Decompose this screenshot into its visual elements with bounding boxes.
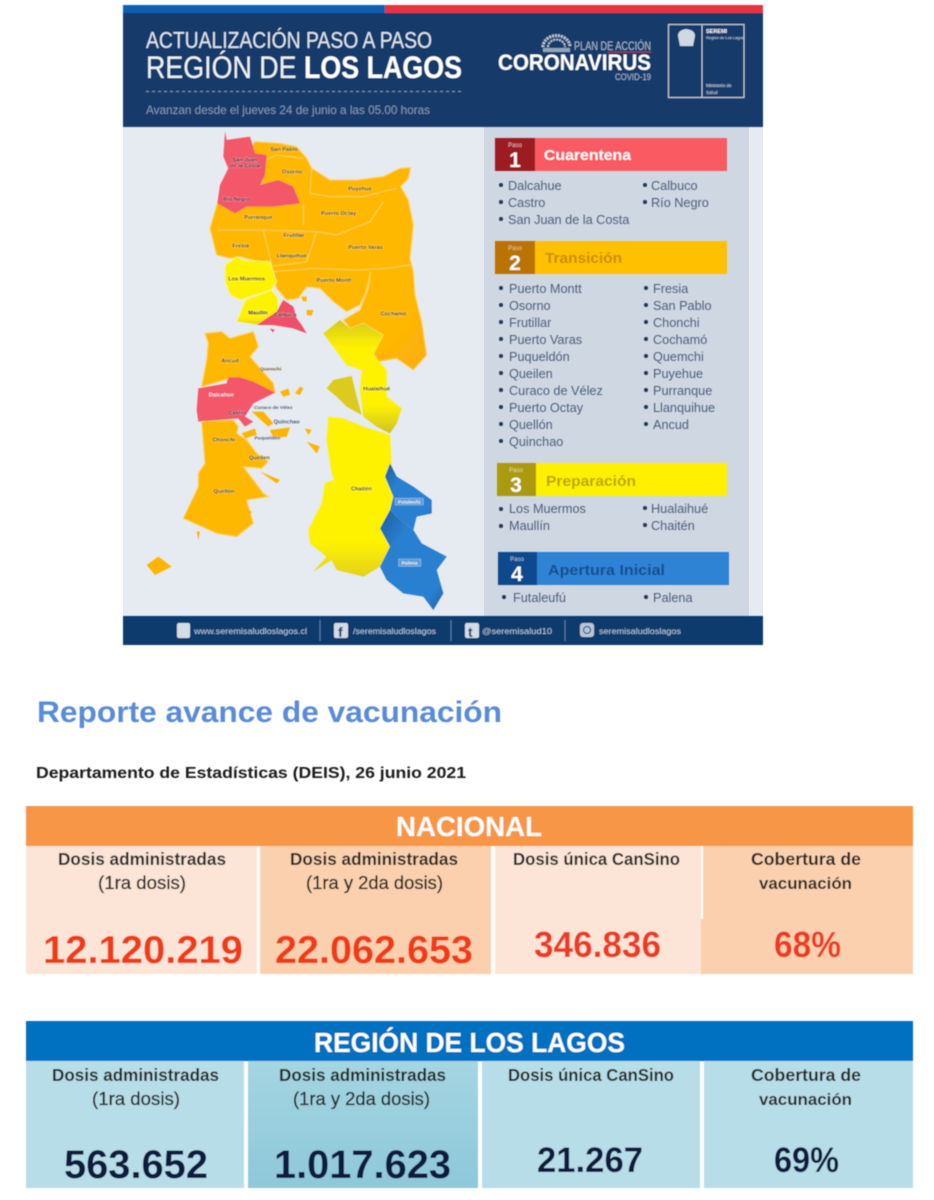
legend: paso 3 preparación: 3 — [510, 474, 522, 497]
cell: dosis 1ra y 2da región: Dosis administradas — [279, 1065, 446, 1085]
icon: instagram — [580, 623, 594, 637]
logo: seremi de salud — [668, 24, 744, 98]
legend: paso 2 transición: Paso — [508, 246, 522, 252]
icon: facebook: f — [338, 624, 343, 640]
list: comunas en transición, columna 2: San Pablo — [653, 299, 712, 313]
legend: paso 3 preparación: Paso — [509, 468, 523, 474]
footer: redes sociales: /seremisaludloslagos — [353, 627, 436, 636]
map labels: comunas del norte — [223, 147, 407, 319]
map labels: comunas del norte: Puyehue — [348, 187, 372, 193]
map labels: comunas del norte: Llanquihue — [277, 253, 307, 259]
list: comunas en apertura inicial: Palena — [653, 591, 693, 605]
map region: los muermos — [225, 257, 277, 300]
cell: dosis única nacional: 346.836 — [534, 924, 661, 965]
cell: cobertura región — [704, 1061, 913, 1188]
map region: chaitén — [308, 417, 393, 577]
footer: redes sociales: www.seremisaludloslagos.cl — [193, 627, 307, 636]
list: comunas en preparación: Chaitén — [651, 519, 695, 533]
map labels: comunas del norte: Frutillar — [283, 233, 305, 239]
map labels: comunas del sur: Dalcahue — [209, 392, 234, 398]
map region: isla chaitén norte — [327, 376, 362, 415]
list: comunas en cuarentena — [499, 179, 709, 227]
list: comunas en transición, columna 1: Curaco de Vélez — [509, 384, 603, 398]
map region: ancud y quemchi — [202, 332, 275, 393]
legend: paso 1 cuarentena: 1 — [509, 149, 521, 172]
cell: dosis 1ra región: (1ra dosis) — [92, 1089, 180, 1109]
map labels: comunas del sur: Castro — [228, 410, 247, 416]
list: comunas en transición, columna 1: Queilen — [509, 367, 553, 381]
table: región de los lagos — [26, 1021, 913, 1188]
map labels: comunas del norte: Puerto Montt — [317, 278, 352, 284]
cell: dosis única región: 21.267 — [537, 1141, 643, 1180]
map labels: comunas del norte: San Juan — [232, 158, 258, 164]
map labels: comunas del norte: Río Negro — [223, 197, 251, 203]
cell: dosis única región: Dosis única CanSino — [508, 1065, 674, 1085]
legend: paso 4 apertura inicial: Paso — [510, 557, 524, 563]
cell: dosis 1ra nacional: Dosis administradas — [58, 849, 226, 869]
map labels: comunas del norte: Osorno — [282, 170, 303, 176]
map island: guafo — [147, 557, 172, 575]
map labels: comunas del sur: Puqueldón — [254, 436, 280, 442]
cell: cobertura nacional: 68% — [774, 924, 841, 965]
map region: límites comunales — [217, 155, 410, 272]
legend: paso 2 transición: Transición — [545, 250, 622, 267]
cell: dosis 1ra y 2da región: (1ra y 2da dosis) — [293, 1089, 430, 1109]
map labels: comunas del norte: Puerto Varas — [348, 245, 383, 251]
list: comunas en transición, columna 2: Purranque — [653, 384, 712, 398]
logo: seremi de salud: Ministerio de — [706, 83, 732, 88]
map labels: comunas del norte: Cochamó — [380, 312, 407, 318]
footer: redes sociales: seremisaludloslagos — [599, 627, 681, 636]
map region: hualaihué — [323, 320, 402, 433]
legend: paso 4 apertura inicial: Apertura Inicial — [548, 562, 665, 579]
map labels: comunas del sur: Quinchao — [274, 420, 300, 426]
subtitle: fecha: Avanzan desde el jueves 24 de junio a las 05.00 horas — [146, 103, 430, 117]
cell: cobertura nacional — [701, 846, 913, 974]
map labels: comunas del norte: Puerto Octay — [321, 211, 357, 217]
map labels: comunas del sur: Ancud — [221, 359, 239, 365]
legend: paso 1 cuarentena — [495, 138, 727, 227]
map labels: comunas del sur: Chaitén — [351, 486, 372, 492]
list: comunas en transición, columna 2: Fresia — [653, 282, 689, 296]
map: chiloé y sector sur — [147, 320, 447, 610]
cell: dosis 1ra y 2da nacional: 22.062.653 — [275, 929, 473, 972]
map labels: comunas del sur: Quellón — [213, 489, 235, 495]
legend: paso 4 apertura inicial — [498, 552, 729, 605]
map labels: comunas del sur: Hualaihué — [363, 386, 390, 392]
cell: cobertura nacional: Cobertura de — [751, 849, 861, 869]
list: comunas en transición, columna 1: Quellón — [509, 418, 553, 432]
heading: región: REGIÓN DE LOS LAGOS — [146, 49, 462, 85]
cell: dosis 1ra nacional — [26, 846, 257, 974]
heading: reporte avance de vacunación: Reporte avance de vacunación — [37, 696, 502, 729]
map region: futaleufú — [385, 463, 432, 530]
table header: región — [26, 1021, 913, 1061]
list: comunas en transición, columna 1: Osorno — [509, 299, 551, 313]
list: comunas en transición, columna 2: Ancud — [653, 418, 689, 432]
cell: dosis 1ra región — [26, 1061, 244, 1188]
map labels: comunas del norte: Purranque — [244, 215, 272, 221]
logo: plan de acción coronavirus — [498, 36, 651, 82]
legend: paso 4 apertura inicial: 4 — [511, 563, 523, 586]
cell: dosis 1ra nacional: 12.120.219 — [43, 929, 243, 972]
table header: nacional: NACIONAL — [396, 811, 542, 842]
list: comunas en transición, columna 2: Chonchi — [653, 316, 700, 330]
cell: dosis 1ra región: 563.652 — [64, 1143, 208, 1187]
map labels: comunas del norte: Maullín — [248, 310, 268, 316]
map labels: comunas del sur: Chonchi — [212, 438, 235, 444]
map region: castro, dalcahue, puqueldón — [197, 377, 275, 427]
icon: twitter — [465, 623, 479, 640]
list: comunas en cuarentena: Dalcahue — [508, 179, 562, 193]
map islands: archipiélago — [147, 387, 320, 575]
map region: continente naranja — [210, 142, 427, 370]
list: comunas en transición, columna 1: Puqueldón — [509, 350, 570, 364]
logo: seremi de salud: Salud — [706, 90, 718, 95]
list: comunas en preparación: Los Muermos — [509, 502, 586, 516]
cell: dosis 1ra y 2da región — [248, 1061, 478, 1188]
map region: san juan de la costa y río negro — [217, 132, 300, 213]
cell: dosis 1ra región: Dosis administradas — [52, 1065, 219, 1085]
list: comunas en preparación: Hualaihué — [651, 502, 708, 516]
logo: seremi de salud: SEREMI — [706, 29, 728, 35]
logo: seremi de salud: Región de Los Lagos — [706, 35, 744, 40]
map labels: comunas del sur: Futaleufú — [398, 499, 421, 505]
cell: dosis única región — [482, 1061, 700, 1188]
logo: plan de acción coronavirus: COVID-19 — [615, 72, 651, 82]
footer: redes sociales: @seremisalud10 — [482, 627, 553, 636]
list: comunas en transición, columna 2: Puyehue — [653, 367, 703, 381]
list: comunas en preparación — [499, 502, 708, 533]
text: fuente deis: Departamento de Estadísticas (DEIS), 26 junio 2021 — [36, 765, 466, 782]
cell: dosis 1ra y 2da nacional: (1ra y 2da dosis) — [306, 873, 443, 893]
list: comunas en transición, columna 1: Frutillar — [509, 316, 552, 330]
heading: actualización: ACTUALIZACIÓN PASO A PASO — [146, 27, 432, 53]
list: comunas en apertura inicial — [502, 591, 693, 605]
list: comunas en cuarentena: San Juan de la Costa — [508, 213, 630, 227]
cell: dosis 1ra y 2da nacional — [260, 846, 491, 974]
list: comunas en cuarentena: Calbuco — [651, 179, 698, 193]
list: comunas en transición, columna 1: Puerto Varas — [509, 333, 582, 347]
map labels: comunas del sur: Queilen — [249, 455, 270, 461]
legend: paso 2 transición — [495, 241, 727, 449]
table header: región: REGIÓN DE LOS LAGOS — [314, 1027, 625, 1058]
list: comunas en transición, columna 1: Puerto Montt — [509, 282, 582, 296]
map labels: comunas del norte: San Pablo — [270, 147, 298, 153]
legend: paso 1 cuarentena: Cuarentena — [544, 147, 632, 164]
list: comunas en apertura inicial: Futaleufú — [513, 591, 566, 605]
legend: paso 2 transición: 2 — [509, 252, 521, 275]
cell: dosis 1ra y 2da nacional: Dosis administradas — [290, 849, 458, 869]
map region: chonchi, queilen, quellón — [183, 420, 268, 537]
list: comunas en transición, columna 2: Llanquihue — [653, 401, 715, 415]
map region: calbuco — [257, 300, 307, 333]
list: comunas en cuarentena: Castro — [508, 196, 545, 210]
map labels: comunas del sur: Curaco de Vélez — [254, 405, 293, 411]
list: comunas en transición, columna 1: Puerto Octay — [509, 401, 584, 415]
logo: plan de acción coronavirus: CORONAVIRUS — [498, 50, 651, 75]
map region: maullín — [237, 290, 278, 325]
cell: dosis única nacional — [495, 846, 701, 974]
map labels: comunas del norte: Los Muermos — [228, 276, 265, 282]
icon: sitio web — [177, 623, 190, 638]
map labels: comunas del norte: de la Costa — [230, 164, 261, 170]
list: comunas en preparación: Maullín — [509, 519, 550, 533]
list: comunas en transición, columna 1 — [499, 282, 603, 449]
legend: paso 3 preparación: Preparación — [546, 473, 636, 490]
map labels: comunas del norte: Calbuco — [274, 313, 297, 319]
cell: dosis 1ra y 2da región: 1.017.623 — [274, 1143, 451, 1187]
map labels: comunas del sur: Quemchi — [260, 366, 282, 372]
cell: cobertura región: vacunación — [759, 1091, 852, 1109]
table header: nacional — [26, 806, 913, 846]
map labels: comunas del sur — [209, 359, 423, 566]
footer: redes sociales — [123, 616, 763, 645]
map islands: seno de reloncaví — [270, 297, 313, 332]
icon: facebook — [334, 623, 348, 640]
cell: cobertura nacional: vacunación — [759, 875, 852, 893]
logo: plan de acción coronavirus: PLAN DE ACCIÓN — [574, 38, 651, 53]
list: comunas en transición, columna 1: Quinchao — [509, 435, 563, 449]
map labels: comunas del sur: Palena — [402, 560, 418, 566]
legend: paso 1 cuarentena: Paso — [508, 143, 522, 149]
cell: dosis 1ra nacional: (1ra dosis) — [98, 873, 186, 893]
list: comunas en transición, columna 2 — [644, 282, 715, 432]
cell: dosis única nacional: Dosis única CanSino — [513, 849, 680, 869]
panel: infographic background — [123, 127, 763, 617]
table: nacional — [26, 806, 913, 974]
map: región de los lagos norte — [210, 132, 427, 370]
map labels: comunas del norte: Fresia — [232, 244, 250, 250]
cell: cobertura región: Cobertura de — [751, 1065, 861, 1085]
panel: header banner — [123, 5, 763, 127]
map region: palena — [380, 510, 447, 610]
cell: cobertura región: 69% — [774, 1141, 839, 1180]
icon: twitter: t — [468, 624, 473, 640]
list: comunas en transición, columna 2: Cochamó — [653, 333, 707, 347]
legend: paso 3 preparación — [497, 463, 727, 533]
list: comunas en transición, columna 2: Quemchi — [653, 350, 704, 364]
list: comunas en cuarentena: Río Negro — [651, 196, 709, 210]
